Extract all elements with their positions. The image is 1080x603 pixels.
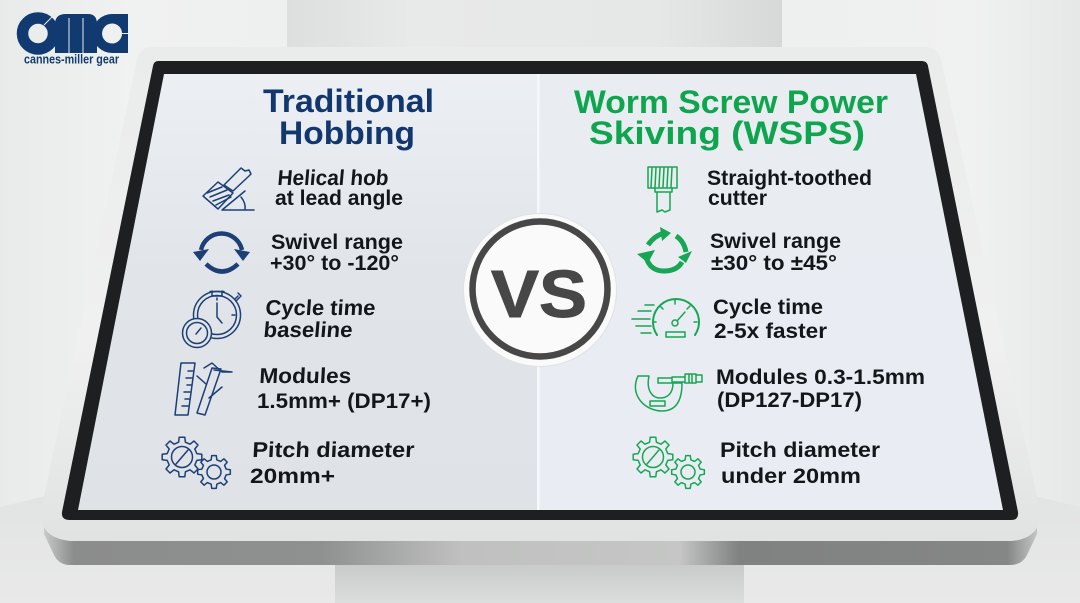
- icon: helical hob: [203, 168, 254, 210]
- heading: traditional hobbing: [263, 83, 434, 151]
- text: swivel range left: Swivel range: [271, 230, 403, 254]
- screen right panel: [538, 74, 1003, 510]
- text: cycle time right: Cycle time: [713, 295, 823, 319]
- text: straight-toothed cutter: [707, 166, 872, 210]
- text: modules left: [257, 364, 431, 413]
- icon: ruler and calipers: [175, 363, 232, 415]
- vs badge: [464, 214, 616, 366]
- text: cycle time right: 2-5x faster: [714, 319, 828, 343]
- text: straight-toothed cutter: Straight-toothed: [707, 166, 872, 190]
- text: pitch diameter right: Pitch diameter: [720, 438, 881, 462]
- icon: micrometer: [635, 374, 702, 411]
- text: modules right: (DP127-DP17): [717, 388, 862, 412]
- text: swivel range right: [710, 229, 841, 275]
- text: helical hob at lead angle: Helical hob: [277, 166, 390, 190]
- text: pitch diameter right: [720, 438, 881, 488]
- icon: gears right: [633, 437, 704, 488]
- heading: worm screw power skiving: Worm Screw Power: [574, 84, 888, 120]
- heading: worm screw power skiving: Skiving (WSPS): [589, 115, 865, 151]
- vs badge: VS: [491, 257, 587, 332]
- text: cycle time baseline: Cycle time: [265, 296, 376, 320]
- text: swivel range right: ±30° to ±45°: [711, 251, 837, 275]
- icon: straight-toothed cutter: [648, 167, 677, 212]
- text: modules right: Modules 0.3-1.5mm: [716, 365, 925, 389]
- logo: cannes-miller gear: cannes-miller gear: [24, 52, 119, 66]
- screen black frame: [62, 61, 1018, 520]
- text: straight-toothed cutter: cutter: [708, 186, 768, 210]
- text: cycle time baseline: baseline: [263, 318, 354, 342]
- text: cycle time right: [713, 295, 828, 343]
- text: modules left: 1.5mm+ (DP17+): [257, 389, 431, 413]
- text: pitch diameter left: 20mm+: [250, 464, 335, 488]
- monitor stand: [335, 565, 744, 603]
- text: cycle time baseline: [263, 296, 376, 342]
- panel: traditional hobbing: [162, 83, 434, 488]
- text: helical hob at lead angle: at lead angle: [275, 186, 403, 210]
- icon: stopwatch and gauge: [182, 291, 241, 348]
- text: pitch diameter right: under 20mm: [721, 464, 861, 488]
- logo: cannes-miller gear: [22, 14, 128, 66]
- text: helical hob at lead angle: [275, 166, 403, 210]
- screen left panel: [78, 74, 538, 510]
- panel: worm screw power skiving: [574, 84, 925, 488]
- text: modules left: Modules: [259, 364, 352, 388]
- monitor bezel: [41, 47, 1040, 541]
- text: swivel range left: +30° to -120°: [270, 251, 399, 275]
- centre divider: [537, 74, 540, 510]
- heading: worm screw power skiving: [574, 84, 888, 151]
- text: pitch diameter left: [250, 438, 416, 488]
- icon: circular arrows: [637, 227, 692, 271]
- text: swivel range left: [270, 230, 403, 275]
- icon: swivel arrows: [193, 234, 250, 272]
- heading: traditional hobbing: Traditional: [263, 83, 434, 119]
- icon: speedometer: [632, 299, 699, 337]
- text: modules right: [716, 365, 925, 412]
- heading: traditional hobbing: Hobbing: [279, 115, 415, 151]
- text: pitch diameter left: Pitch diameter: [252, 438, 416, 462]
- icon: gears left: [162, 437, 230, 488]
- text: swivel range right: Swivel range: [710, 229, 841, 253]
- monitor lower metal edge: [44, 525, 1037, 565]
